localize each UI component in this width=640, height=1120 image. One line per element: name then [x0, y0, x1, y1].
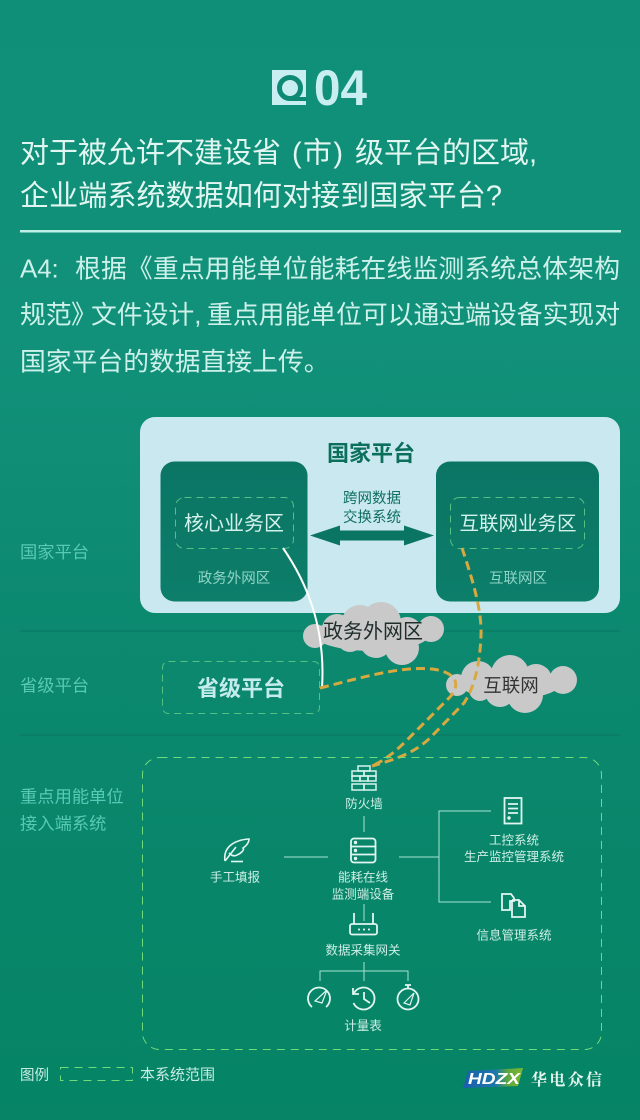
label: firewall: 防火墙 — [345, 796, 383, 811]
side labels: 接入端系统 — [20, 814, 106, 834]
connector lines — [284, 811, 491, 981]
title: 级平台的区域, — [355, 136, 537, 170]
answer text: 重点用能单位可以通过端设备实现对 — [207, 300, 620, 330]
icon: files — [502, 894, 525, 917]
panel: enterprise terminal system — [142, 758, 602, 1050]
cloud: internet: 互联网 — [483, 675, 539, 696]
label: control system: 工控系统 — [489, 834, 539, 848]
panel: internet zone: 互联网区 — [489, 570, 547, 587]
label: information system: 信息管理系统 — [476, 928, 552, 942]
side labels — [20, 542, 124, 834]
cloud: internet — [446, 655, 577, 713]
heading: national platform: 国家平台 — [327, 441, 415, 466]
answer text: 》 — [71, 302, 97, 330]
label: terminal device: 能耗在线 — [338, 870, 388, 884]
panel: provincial platform: 省级平台 — [197, 676, 285, 701]
panel: internet zone — [436, 462, 599, 602]
panel: government extranet zone: 政务外网区 — [198, 570, 270, 587]
icon: gauge — [308, 988, 330, 1007]
logo — [463, 1068, 602, 1089]
legend: 本系统范围 — [140, 1066, 215, 1084]
cloud: government extranet: 政务外网区 — [323, 620, 423, 643]
connector: government line — [283, 548, 322, 688]
answer text: A4: — [20, 256, 59, 284]
panel: government extranet zone: 核心业务区 — [184, 512, 284, 535]
icon: stopwatch — [398, 985, 418, 1010]
exchange system label — [343, 490, 401, 526]
label: control system: 生产监控管理系统 — [464, 849, 564, 864]
icon: question badge — [272, 70, 306, 105]
answer text: 根据《重点用能单位能耗在线监测系统总体架构 — [75, 254, 620, 284]
side labels: 重点用能单位 — [20, 786, 124, 806]
cloud: government extranet — [303, 602, 444, 665]
panel: government extranet zone — [160, 462, 308, 602]
icon: quill — [225, 839, 249, 862]
label: manual entry: 手工填报 — [210, 870, 260, 884]
title: 企业端系统数据如何对接到国家平台? — [20, 180, 502, 212]
panel: internet zone: 互联网业务区 — [459, 513, 577, 535]
arrow: bidirectional exchange — [310, 526, 434, 546]
side labels: 省级平台 — [20, 676, 89, 696]
icon: control document — [504, 798, 522, 824]
panel: provincial platform — [162, 662, 320, 714]
icon: server — [351, 838, 376, 862]
title: 对于被允许不建设省 — [20, 136, 281, 170]
icon: clock history — [353, 987, 375, 1009]
legend: 图例 — [20, 1067, 49, 1084]
title: (市) — [292, 136, 343, 170]
icon: router — [350, 913, 377, 934]
answer text: 文件设计, — [91, 300, 201, 330]
logo: HDZX — [468, 1071, 522, 1088]
answer text — [20, 254, 620, 376]
label: terminal device — [332, 870, 395, 902]
icon: firewall — [352, 766, 376, 790]
label: meters: 计量表 — [344, 1019, 382, 1033]
logo: 华电众信 — [531, 1070, 602, 1089]
side labels: 国家平台 — [20, 542, 89, 562]
connector: province dashed line — [320, 669, 456, 766]
label: terminal device: 监测端设备 — [332, 886, 395, 902]
label: control system — [464, 834, 564, 864]
title — [20, 136, 537, 212]
answer text: 国家平台的数据直接上传。 — [20, 348, 330, 376]
question number: 04 — [314, 60, 367, 116]
exchange system label: 跨网数据 — [343, 490, 401, 507]
exchange system label: 交换系统 — [343, 508, 401, 526]
answer text: 规范 — [20, 300, 72, 330]
connector: internet dashed line — [372, 548, 481, 766]
label: gateway: 数据采集网关 — [325, 942, 401, 958]
legend — [20, 1066, 215, 1084]
panel: national platform — [140, 417, 620, 613]
